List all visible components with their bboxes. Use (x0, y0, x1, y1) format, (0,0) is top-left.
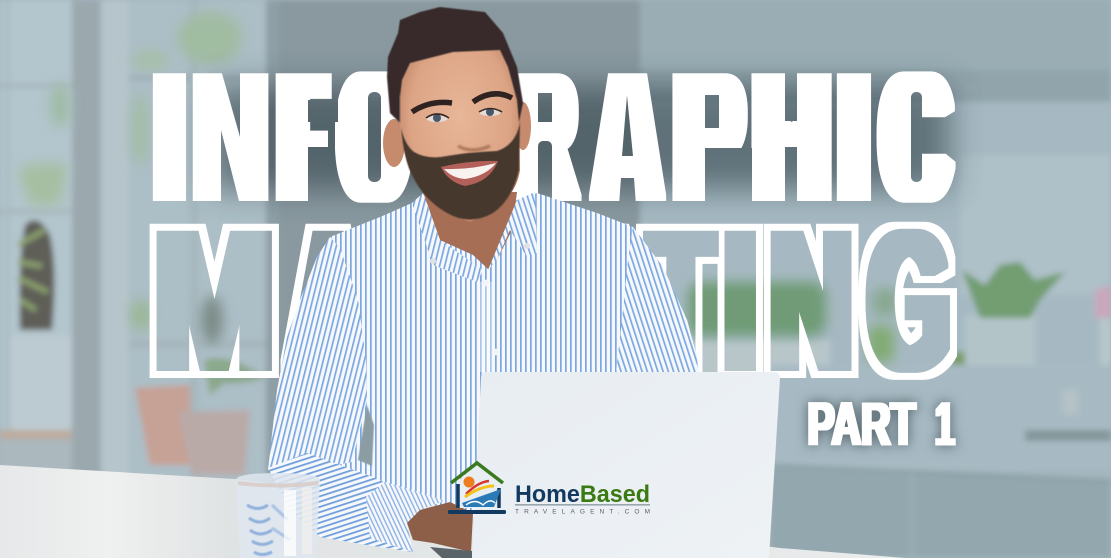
man: face (400, 40, 520, 222)
title shadow glow (210, 85, 950, 190)
man: shirt torso (300, 193, 700, 520)
man: cuff (366, 482, 447, 552)
title: INFOGRAPHIC: A (600, 38, 655, 236)
man: mouth (441, 161, 498, 186)
title: INFOGRAPHIC: P (680, 38, 738, 236)
title: INFOGRAPHIC: G (428, 38, 487, 236)
logo icon: house with cruise ship (448, 463, 506, 514)
title: MARKETING outlined (154, 190, 949, 411)
title: MARKETING outlined: G (868, 190, 950, 411)
title: MARKETING outlined: R (385, 190, 457, 411)
title: INFOGRAPHIC: R (510, 38, 570, 236)
man: placket and buttons (430, 243, 530, 372)
logo underline (515, 504, 650, 506)
title: MARKETING outlined: I (723, 190, 757, 411)
man: ears (383, 102, 531, 167)
subtitle: PART 1: 1 (935, 390, 955, 458)
title: INFOGRAPHIC: O (345, 38, 403, 236)
background: table top (0, 465, 905, 558)
background: soft foliage and bokeh (18, 12, 898, 362)
man: neck (423, 192, 517, 269)
drinking glass (236, 473, 320, 558)
man: left collar (412, 193, 483, 282)
text: C (886, 38, 945, 236)
title: MARKETING outlined: K (470, 190, 542, 411)
title: MARKETING outlined: E (555, 190, 621, 411)
man: right collar (488, 192, 537, 270)
subtitle: PART 1: PART (808, 390, 916, 458)
title: INFOGRAPHIC: H (758, 38, 825, 236)
title: INFOGRAPHIC: F (285, 38, 321, 236)
man: left sleeve (268, 237, 367, 470)
logo wordmark: HomeBased (515, 482, 650, 508)
title: MARKETING outlined: A (292, 190, 364, 411)
man: hand (407, 502, 473, 552)
man: forearm (268, 453, 420, 552)
title: MARKETING outlined: M (154, 190, 275, 411)
man: hair (387, 7, 523, 123)
title: MARKETING outlined: N (770, 190, 852, 411)
logo tagline: TRAVELAGENT.COM (515, 508, 650, 516)
title: MARKETING outlined: T (649, 190, 713, 411)
man: right sleeve (616, 227, 698, 372)
laptop (430, 372, 780, 558)
man: beard (401, 122, 520, 220)
man: nose (458, 146, 490, 150)
title: INFOGRAPHIC: I (162, 38, 176, 236)
title: INFOGRAPHIC (152, 71, 956, 203)
man: gap between arm and torso (358, 405, 374, 466)
man in striped shirt (268, 7, 700, 552)
title: INFOGRAPHIC: N (200, 38, 261, 236)
laptop base sliver (430, 547, 472, 558)
title: INFOGRAPHIC: I (846, 38, 862, 236)
logo: HomeBased Travel Agent (448, 463, 650, 516)
man: eyes and brows (412, 94, 512, 122)
